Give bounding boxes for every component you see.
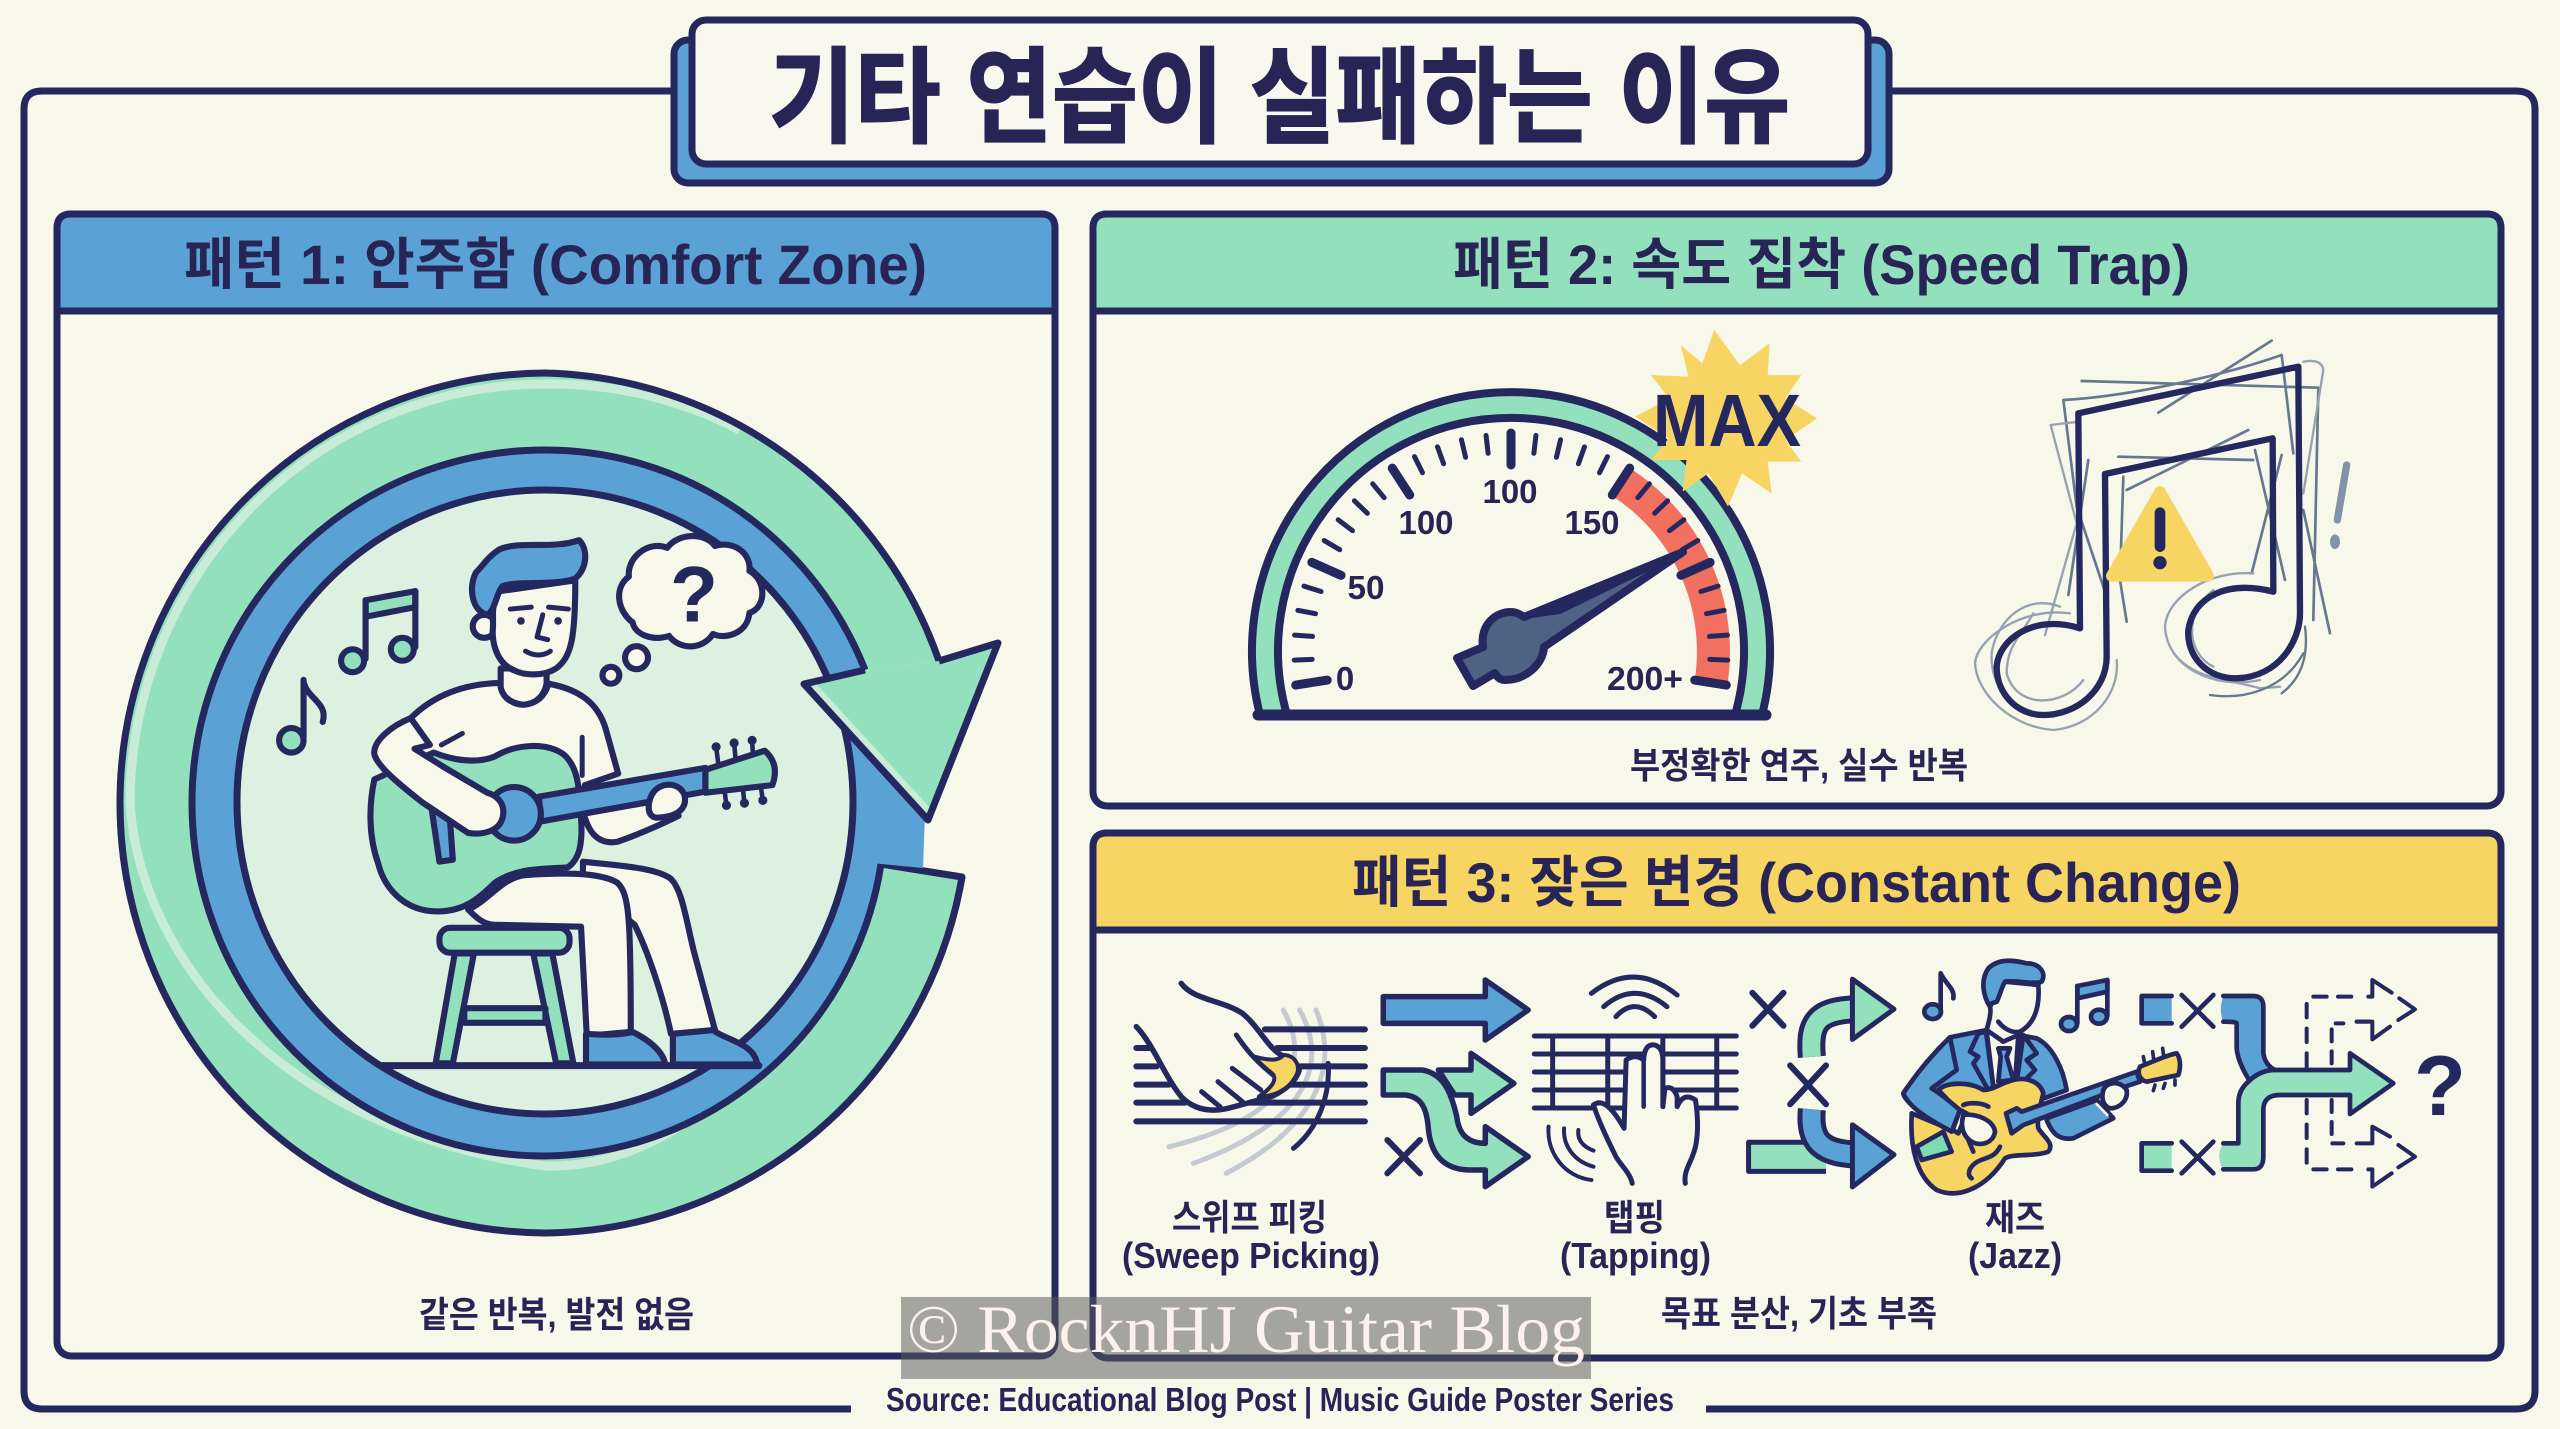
needle bbox=[1457, 552, 1683, 686]
label: jazz: 재즈 bbox=[1985, 1197, 2045, 1238]
torso bbox=[411, 683, 618, 844]
guitarist illustration: ? bbox=[670, 551, 718, 639]
panel 2 heading: 패턴 2: 속도 집착 (Speed Trap) bbox=[1453, 233, 2190, 296]
sketch strokes bbox=[2063, 341, 2330, 633]
question mark: ? bbox=[2414, 1039, 2466, 1134]
exclamation mark bbox=[2330, 465, 2347, 549]
gauge numbers bbox=[1336, 473, 1683, 697]
source footer: Source: Educational Blog Post | Music Guide Poster Series bbox=[886, 1381, 1674, 1418]
caption pattern 3: 목표 분산, 기초 부족 bbox=[1661, 1293, 1937, 1334]
jazz music notes bbox=[1924, 973, 2107, 1031]
arrows: third transition bbox=[2142, 980, 2415, 1187]
jacket and head bbox=[1903, 1030, 2067, 1132]
label: jazz bbox=[1968, 1197, 2062, 1276]
gauge numbers: 100 bbox=[1482, 473, 1538, 510]
arrows: first transition bbox=[1383, 980, 1528, 1187]
main note outline bbox=[1997, 367, 2300, 715]
legs and shoes bbox=[468, 874, 631, 1036]
circular arrow loop bbox=[120, 373, 998, 1233]
label: sweep picking bbox=[1122, 1197, 1380, 1276]
icon: tapping hand bbox=[1534, 977, 1736, 1183]
jazz guitar body bbox=[1911, 1079, 2050, 1193]
thought bubble bbox=[602, 536, 762, 684]
MAX label: MAX bbox=[1653, 379, 1801, 462]
icon: jazz guitarist bbox=[1903, 961, 2180, 1193]
gauge numbers: 150 bbox=[1564, 504, 1620, 541]
label: jazz: (Jazz) bbox=[1968, 1235, 2062, 1276]
gauge numbers: 100 bbox=[1398, 504, 1454, 541]
warning triangle bbox=[2112, 492, 2208, 576]
back leg bbox=[583, 862, 715, 1034]
icon row left: picking hand, arrows, tapping hand bbox=[1136, 977, 1736, 1187]
stool bbox=[436, 928, 573, 1063]
left arm bbox=[1903, 1037, 1960, 1132]
guitar bbox=[370, 746, 582, 911]
title text: 기타 연습이 실패하는 이유 bbox=[769, 41, 1790, 157]
icon: picking hand bbox=[1136, 983, 1365, 1173]
major ticks bbox=[1296, 433, 1726, 685]
music notes bbox=[279, 591, 415, 753]
panel 1 heading: 패턴 1: 안주함 (Comfort Zone) bbox=[184, 233, 927, 296]
minor ticks bbox=[1294, 435, 1728, 660]
title banner bbox=[674, 20, 1889, 183]
panel: pattern 2 speed trap bbox=[1093, 214, 2501, 806]
label: tapping: (Tapping) bbox=[1560, 1235, 1711, 1276]
label: tapping bbox=[1560, 1197, 1711, 1276]
right sleeve bbox=[2047, 1100, 2113, 1139]
caption pattern 1: 같은 반복, 발전 없음 bbox=[419, 1294, 694, 1335]
gauge numbers: 0 bbox=[1336, 660, 1354, 697]
broken blue path bbox=[2142, 995, 2275, 1082]
arms bbox=[583, 802, 679, 842]
panel: pattern 3 constant change bbox=[1093, 833, 2501, 1358]
watermark: © RocknHJ Guitar Blog bbox=[907, 1291, 1585, 1367]
panel: pattern 1 comfort zone bbox=[57, 214, 1055, 1356]
label: tapping: 탭핑 bbox=[1604, 1197, 1665, 1238]
gauge numbers: 200+ bbox=[1607, 660, 1683, 697]
jazz guitar neck bbox=[2143, 1048, 2175, 1091]
gauge numbers: 50 bbox=[1348, 569, 1384, 606]
label: sweep picking: (Sweep Picking) bbox=[1122, 1235, 1380, 1276]
head bbox=[473, 580, 575, 705]
broken green path with main arrow bbox=[2142, 1053, 2393, 1173]
panel 3 heading: 패턴 3: 잦은 변경 (Constant Change) bbox=[1352, 851, 2241, 914]
arrows: second transition bbox=[1749, 979, 1894, 1187]
red zone bbox=[1621, 482, 1713, 683]
label: sweep picking: 스위프 피킹 bbox=[1172, 1197, 1327, 1238]
dashed alternative arrows bbox=[2307, 980, 2415, 1187]
speedometer gauge bbox=[1252, 330, 1817, 715]
caption pattern 2: 부정확한 연주, 실수 반복 bbox=[1630, 745, 1968, 786]
MAX starburst bbox=[1635, 330, 1817, 507]
guitarist illustration bbox=[279, 536, 775, 1066]
sketchy music note with warning bbox=[1975, 341, 2347, 730]
